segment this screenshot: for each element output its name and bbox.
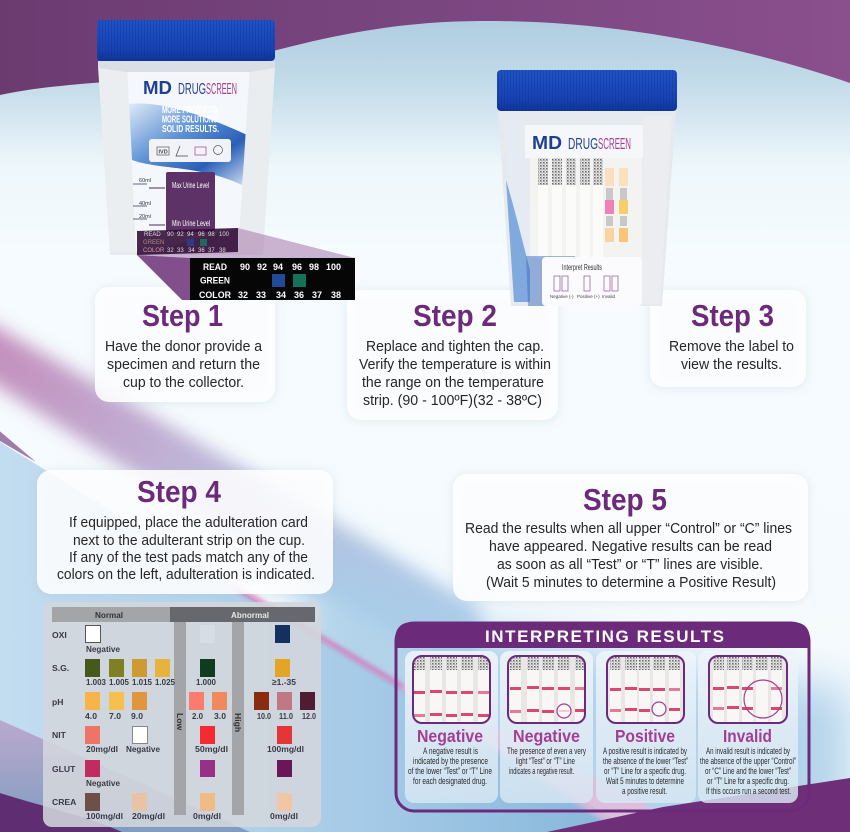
swatch value labels: 11.0 [279, 711, 293, 721]
cup 2 logo label: DRUG [568, 136, 598, 153]
result card: negative: for each designated drug. [413, 776, 487, 786]
result card: negative: of the lower “Test” or “T” Line [408, 766, 492, 776]
swatch value labels: 1.003 [86, 677, 106, 687]
cup 2 logo label: MD [532, 133, 562, 153]
panel: adulteration color chart [43, 602, 321, 827]
panel: step 1 [95, 287, 275, 402]
cup 2 interpret results card [526, 256, 642, 306]
result card: positive: Wait 5 minutes to determine [606, 776, 684, 786]
panel: step 2: Replace and tighten the cap. [366, 339, 544, 355]
swatch value labels: Negative [86, 778, 120, 788]
result card: faint line negative: Negative [513, 726, 580, 746]
result card: invalid: If this occurs run a second test. [706, 786, 791, 796]
result card: negative: A negative result is [423, 746, 478, 756]
swatch value labels: 2.0 [192, 711, 203, 721]
swatch value labels: 100mg/dl [267, 744, 304, 754]
result card: positive: Positive [615, 726, 675, 746]
panel: step 4: colors on the left, adulteration is indicated. [57, 567, 315, 583]
temperature strip callout: GREEN [200, 276, 230, 286]
temperature strip callout: COLOR [199, 290, 231, 300]
swatch value labels: ≥1.-35 [272, 677, 296, 687]
temperature strip callout: 37 [312, 290, 322, 300]
cup 1 slogan [162, 105, 219, 135]
swatch value labels: 10.0 [257, 711, 271, 721]
small temperature strip on cup: 98 [208, 232, 215, 238]
cup 2 interpret results card: Positive (+) [577, 294, 600, 299]
panel: step 3 [650, 290, 806, 387]
cup 2 logo label [525, 125, 643, 158]
panel: step 4: If equipped, place the adulteration card [69, 515, 308, 531]
cup 1 photo [97, 20, 275, 255]
result card: positive [596, 651, 696, 803]
color swatches [85, 625, 315, 811]
panel: step 2: the range on the temperature [362, 375, 544, 391]
cup 2 interpret results card: Interpret Results [562, 263, 602, 272]
test strip photo [709, 656, 787, 723]
cup 1 photo: SCREEN [206, 81, 237, 98]
low and high bars: Low [175, 713, 185, 730]
result card: faint line negative: light “Test” or “T” Line [516, 756, 575, 766]
panel: step 2: strip. (90 - 100ºF)(32 - 38ºC) [363, 393, 542, 409]
small temperature strip on cup: 92 [177, 232, 184, 238]
panel: step 3: Step 3 [691, 298, 774, 333]
swatch value labels: 4.0 [85, 711, 97, 721]
swatch value labels: 1.015 [132, 677, 152, 687]
panel: step 1: specimen and return the [107, 357, 260, 373]
result card: negative: Negative [417, 726, 483, 746]
cup 2 test strips [530, 158, 642, 258]
small temperature strip on cup: 36 [198, 248, 205, 254]
swatch value labels: 0mg/dl [270, 811, 298, 821]
swatch value labels: 20mg/dl [132, 811, 165, 821]
swatch value labels: 7.0 [109, 711, 121, 721]
swatch value labels [85, 644, 316, 821]
cup 1 urine level panel [133, 172, 215, 232]
cup 1 symbols panel [149, 139, 231, 162]
row labels: OXI [52, 630, 67, 640]
small temperature strip on cup: 90 [167, 232, 174, 238]
cup 1 logo [141, 76, 239, 98]
temperature strip callout: 90 [240, 262, 250, 272]
panel: step 2: Step 2 [413, 298, 497, 333]
panel: step 3: Remove the label to [669, 339, 794, 355]
result card: negative: indicated by the presence [413, 756, 488, 766]
panel: step 4: If any of the test pads match any of the [69, 550, 308, 566]
result card: invalid: or “T” Line for a specific drug. [707, 776, 789, 786]
chart header [52, 607, 315, 622]
result card: positive: A positive result is indicated by [603, 746, 687, 756]
test strip photo [413, 656, 490, 723]
cup 2 interpret results card: Negative (-) [550, 294, 574, 299]
temperature strip callout: 100 [326, 262, 341, 272]
chart header: Normal [95, 610, 123, 620]
swatch value labels: 3.0 [214, 711, 226, 721]
small temperature strip on cup [143, 232, 230, 254]
panel: step 1: Have the donor provide a [105, 339, 263, 355]
panel: step 5: Step 5 [583, 482, 667, 517]
cup 1 urine level panel: Max Urine Level [172, 180, 209, 190]
temperature strip callout: READ [203, 262, 227, 272]
swatch value labels: Negative [86, 644, 120, 654]
result card: negative [405, 651, 498, 803]
result card: faint line negative: The presence of even a very [507, 746, 586, 756]
swatch value labels: 20mg/dl [86, 744, 118, 754]
result card: invalid [698, 651, 798, 803]
cup 1 slogan: SOLID RESULTS. [162, 124, 219, 135]
swatch value labels: 1.025 [155, 677, 175, 687]
panel: step 5: (Wait 5 minutes to determine a Positive Result) [486, 575, 776, 591]
result card: positive: the absence of the lower “Test” [603, 756, 688, 766]
interpreting results header: INTERPRETING RESULTS [485, 627, 724, 646]
cup 1 symbols panel: IVD [158, 150, 168, 156]
row labels: CREA [52, 797, 76, 807]
swatch value labels: 1.000 [196, 677, 216, 687]
cup 1 slogan: MORE SOLUTIONS. [162, 114, 219, 126]
row labels: pH [52, 697, 63, 707]
cup 1 cap [97, 20, 275, 61]
result card: faint line negative [500, 651, 593, 803]
temperature strip callout: 94 [273, 262, 283, 272]
interpreting results header [395, 622, 810, 648]
chart header: Abnormal [231, 610, 269, 620]
panel: step 4: Step 4 [137, 474, 222, 509]
small temperature strip on cup: 37 [208, 248, 215, 254]
small temperature strip on cup: COLOR [143, 248, 165, 254]
low and high bars: High [233, 713, 243, 732]
result card: invalid: the absence of the upper “Control” [700, 756, 796, 766]
swatch value labels: 0mg/dl [193, 811, 221, 821]
temperature strip callout: 96 [292, 262, 302, 272]
cup 1 slogan: MORE PRODUCTS. [162, 105, 219, 116]
panel: step 5: Read the results when all upper “Control” or “C” lines [465, 521, 792, 537]
panel: interpreting results [395, 622, 810, 811]
test strip photo [607, 656, 684, 723]
low and high bars [174, 622, 244, 815]
cup 2 interpret results card: Invalid [602, 294, 616, 299]
temperature strip callout: 33 [256, 290, 266, 300]
temperature strip callout: 38 [331, 290, 341, 300]
cup 2 photo [497, 70, 677, 306]
cup 1 logo: MD [143, 78, 172, 98]
result card: invalid: Invalid [723, 726, 772, 746]
small temperature strip on cup: READ [144, 232, 161, 238]
result card: positive: a positive result. [622, 786, 667, 796]
zoom wedge to temperature strip [137, 228, 355, 300]
small temperature strip on cup: GREEN [143, 240, 164, 246]
temperature strip callout: 34 [276, 290, 286, 300]
small temperature strip on cup: 100 [219, 232, 230, 238]
row labels: S.G. [52, 663, 69, 673]
panel: step 5: as soon as all “Test” or “T” lines are visible. [497, 557, 763, 573]
result card: invalid: or “C” Line and the lower “Test” [705, 766, 791, 776]
temperature strip callout: 36 [294, 290, 304, 300]
panel: step 5: have appeared. Negative results can be read [489, 539, 772, 555]
cup 2 logo label: SCREEN [598, 136, 631, 153]
result card: invalid: An invalid result is indicated by [706, 746, 790, 756]
panel: step 4: next to the adulterant strip on the cup. [73, 533, 305, 549]
cup 1 logo: DRUG [178, 81, 206, 98]
small temperature strip on cup: 96 [198, 232, 205, 238]
cup 1 urine level panel: Min Urine Level [172, 218, 210, 228]
small temperature strip on cup: 32 [167, 248, 174, 254]
cup 1 urine level panel: 60ml [139, 178, 151, 184]
small temperature strip on cup: 33 [177, 248, 184, 254]
small temperature strip on cup: 38 [219, 248, 226, 254]
swatch value labels: 100mg/dl [86, 811, 123, 821]
cup 1 urine level panel: 40ml [139, 201, 151, 207]
swatch value labels: Negative [126, 744, 160, 754]
swatch value labels: 1.005 [109, 677, 129, 687]
temperature strip callout [190, 258, 355, 300]
small temperature strip on cup: 94 [187, 232, 194, 238]
panel: step 4 [37, 470, 333, 594]
swatch value labels: 9.0 [131, 711, 143, 721]
row labels [52, 630, 76, 807]
panel: step 5 [453, 474, 808, 601]
panel: step 2: Verify the temperature is within [359, 357, 551, 373]
temperature strip callout: 32 [238, 290, 248, 300]
temperature strip callout: 98 [309, 262, 319, 272]
result card: faint line negative: indicates a negative result. [509, 766, 574, 776]
row labels: NIT [52, 730, 67, 740]
result card: positive: or “T” Line for a specific drug. [604, 766, 686, 776]
panel: step 1: Step 1 [142, 298, 223, 333]
swatch value labels: 50mg/dl [195, 744, 228, 754]
test strip photo [508, 656, 585, 723]
panel: step 3: view the results. [681, 357, 782, 373]
temperature strip callout: 92 [257, 262, 267, 272]
cup 1 urine level panel: 20ml [139, 214, 151, 220]
cup 2 cap [497, 70, 677, 111]
panel: step 1: cup to the collector. [123, 375, 244, 391]
swatch value labels: 12.0 [302, 711, 316, 721]
small temperature strip on cup: 34 [188, 248, 195, 254]
row labels: GLUT [52, 764, 76, 774]
panel: step 2 [347, 290, 558, 420]
